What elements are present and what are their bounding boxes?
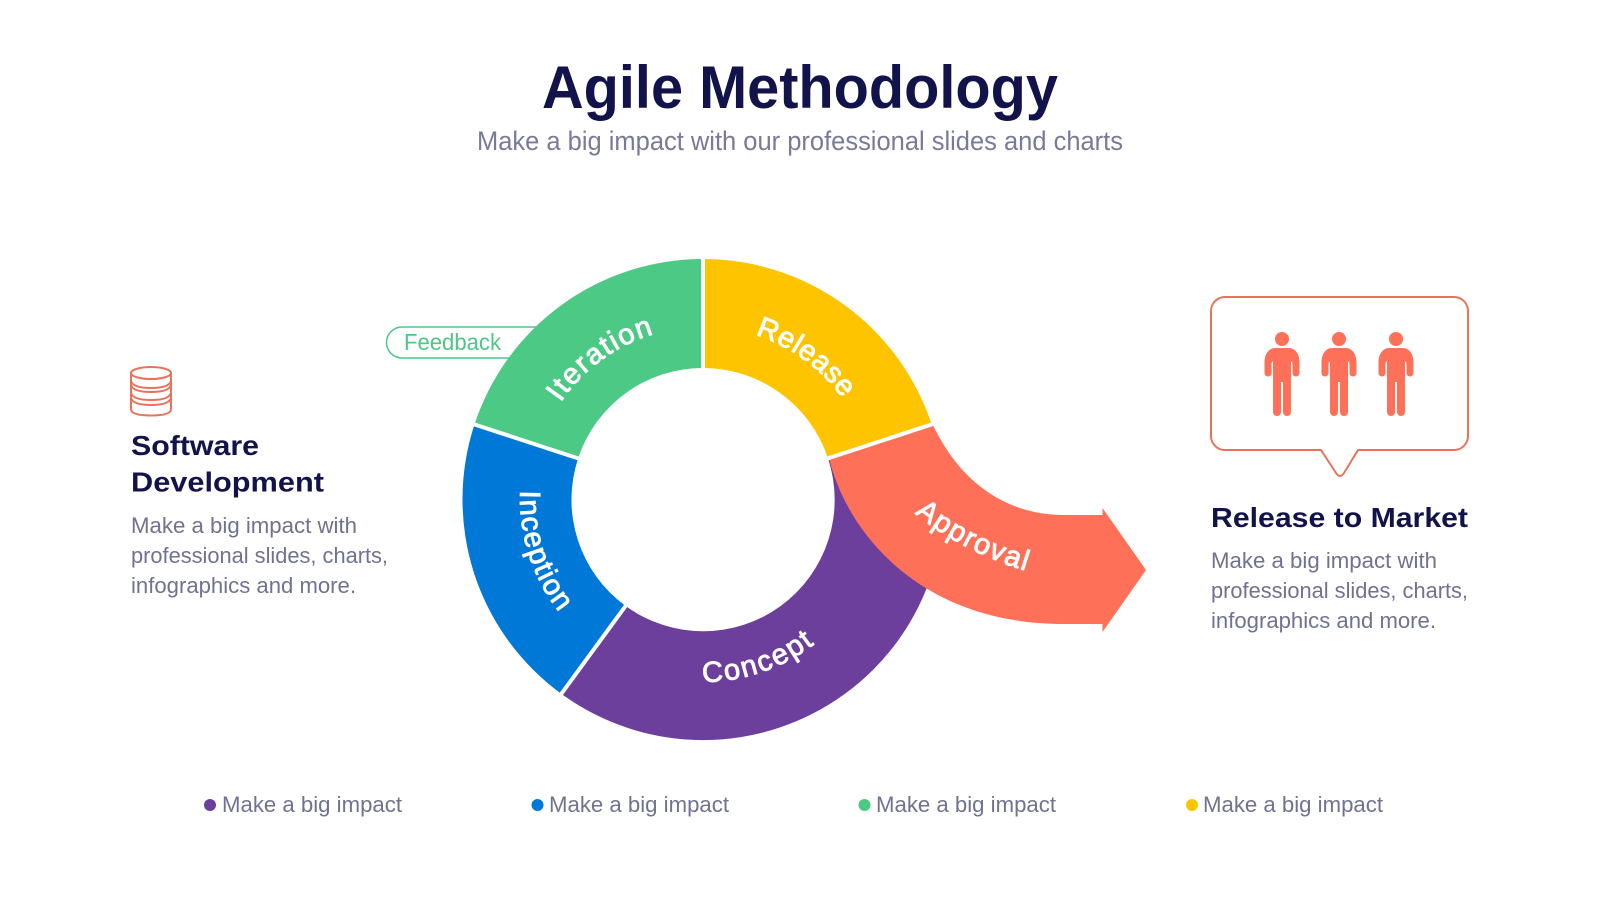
legend item: purple: Make a big impact [222, 792, 402, 817]
icon: person 3 [1378, 332, 1414, 416]
text block: release description: professional slides, charts, [1211, 578, 1468, 603]
text block: software description: infographics and more. [131, 573, 356, 598]
panel: software development [131, 367, 388, 598]
text block: software description: Make a big impact with [131, 513, 357, 538]
legend item: yellow: Make a big impact [1203, 792, 1383, 817]
label: approval: Approval [914, 502, 1030, 571]
segment: inception [462, 425, 626, 694]
icon: speech bubble with people [1211, 297, 1468, 476]
text block: software description: professional slides, charts, [131, 543, 388, 568]
text block: release description [1211, 548, 1468, 633]
legend [204, 792, 1383, 817]
text block: software description [131, 513, 388, 598]
arrow: approval [829, 425, 1146, 632]
icon: database [131, 367, 171, 416]
segment: iteration [474, 259, 703, 459]
icon: person 2 [1322, 332, 1356, 416]
text block: release description: Make a big impact with [1211, 548, 1437, 573]
segment: release [703, 259, 932, 458]
heading: software development: Development [131, 466, 324, 498]
label: release: Release [756, 316, 852, 396]
legend item: green: Make a big impact [876, 792, 1056, 817]
text block: release description: infographics and more. [1211, 608, 1436, 633]
chart: agile cycle ring [462, 259, 1146, 740]
segment: concept [562, 425, 944, 740]
icon: person 1 [1264, 332, 1300, 416]
label: concept: Concept [703, 630, 815, 682]
callout: feedback [386, 327, 586, 358]
title: Agile Methodology [542, 54, 1059, 121]
legend item: blue: Make a big impact [549, 792, 729, 817]
heading: software development: Software [131, 430, 259, 461]
heading: release to market: Release to Market [1211, 502, 1468, 533]
panel: release to market [1211, 297, 1468, 633]
subtitle: Make a big impact with our professional slides and charts [477, 126, 1123, 156]
callout: feedback: Feedback [404, 329, 501, 355]
label: iteration: Iteration [545, 320, 652, 401]
segment dividers [470, 254, 936, 697]
label: inception: Inception [520, 492, 570, 612]
